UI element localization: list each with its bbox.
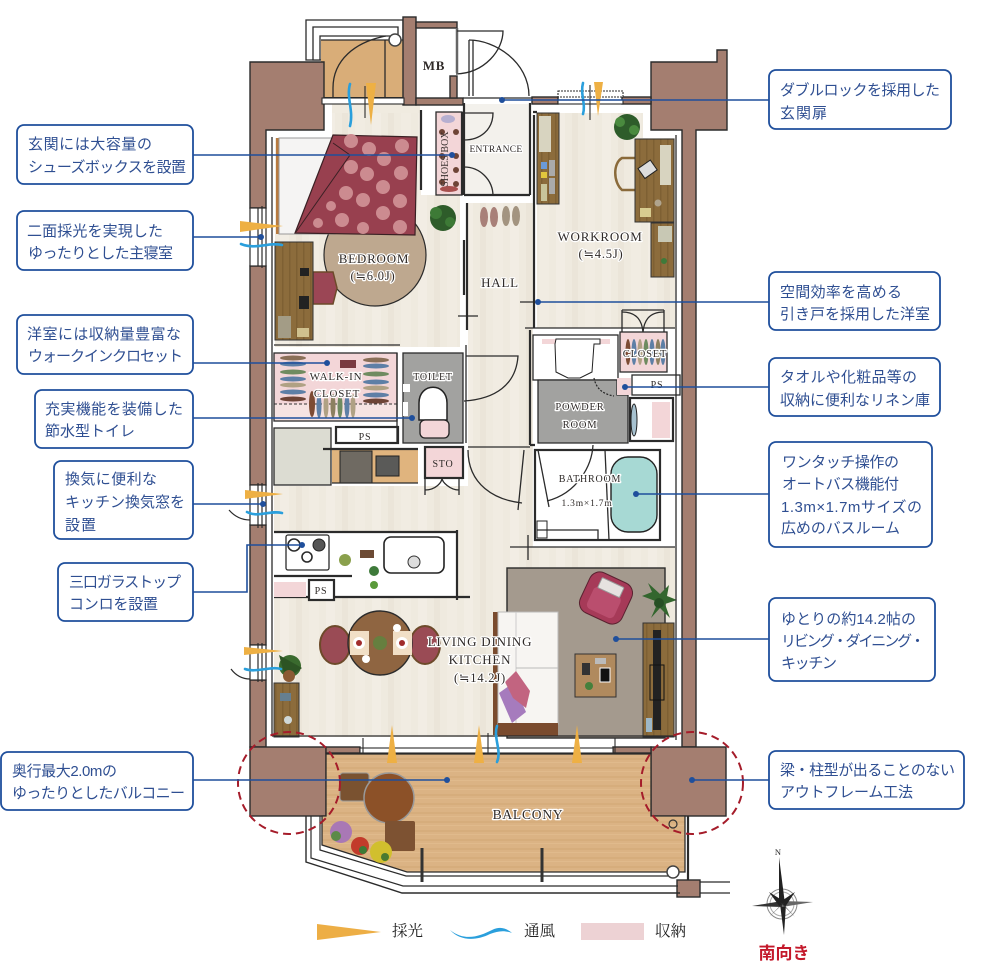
room labels: BATHROOM [559,474,621,485]
room labels: BALCONY [493,807,563,822]
walls [250,17,727,897]
interior partition walls [272,103,676,740]
legend: airflow [450,922,556,940]
callout: LDK: リビング・ダイニング・ [781,633,925,650]
callout: stove: 三口ガラストップ [69,574,181,591]
room labels: PS [315,586,327,597]
callout: balcony: ゆったりとしたバルコニー [12,785,185,802]
room labels: MB [423,58,445,73]
room labels: PS [359,432,371,443]
room labels: STO [432,459,454,470]
room labels: (≒14.2J) [454,671,506,685]
room labels: BOX [440,131,451,153]
callout: linen [622,358,940,416]
room labels [310,58,667,822]
callout: stove [58,542,305,621]
room labels: ROOM [563,420,597,431]
airflow markers [241,83,584,762]
callout: front door [499,70,951,129]
callout: toilet [35,390,415,448]
callout: bedroom: 二面採光を実現した [27,223,163,240]
light markers [240,82,603,763]
callout: kitchen window: 換気に便利な [65,471,157,488]
room: workroom floor [537,113,675,328]
south windows [360,733,615,762]
callout: sliding door [535,272,940,330]
top windows [322,85,623,120]
callout: front door: ダブルロックを採用した [780,81,940,99]
callout: shoe box: 玄関には大容量の [28,136,152,153]
room labels: POWDER [555,402,605,413]
callout: balcony [1,752,450,810]
room: bathroom [535,445,660,540]
room labels: TOILET [413,372,453,383]
room: toilet [403,353,463,443]
compass [752,847,813,963]
room labels: (≒4.5J) [579,247,623,261]
room labels: 1.3m×1.7m [561,499,613,509]
left windows [229,206,266,682]
callout: bathroom: ワンタッチ操作の [782,454,899,471]
legend: storage: 収納 [655,922,686,940]
kitchen island [274,530,470,600]
room: LDK floor [274,486,675,737]
room: STO [425,447,463,478]
TV cabinet [643,623,674,737]
entry porch [306,20,420,113]
callout: balcony: 奥行最大2.0mの [12,763,117,780]
room: hall floor [468,203,533,533]
callout: toilet: 節水型トイレ [45,423,135,440]
legend: storage [581,922,686,940]
callout: linen: タオルや化粧品等の [780,368,917,386]
floor plan [229,17,743,897]
callout: toilet: 充実機能を装備した [45,401,183,418]
callout: outframe [689,751,964,809]
room labels: HALL [481,275,519,290]
legend: light: 採光 [392,922,423,940]
side cabinet and plant [274,655,302,737]
callout: stove: コンロを設置 [69,596,158,613]
callout: bedroom [17,211,264,270]
callout: walk-in closet [17,315,330,374]
callout: outframe: アウトフレーム工法 [780,784,913,801]
callout: front door: 玄関扉 [780,105,827,122]
shoe box [436,112,462,195]
callout: kitchen window: 設置 [65,517,96,534]
room labels: WALK-IN [310,371,362,383]
compass label: 南向き [758,944,810,963]
room labels: LIVING DINING [428,634,532,649]
callout: linen: 収納に便利なリネン庫 [780,392,930,409]
coffee table [575,654,616,697]
callout: sliding door: 引き戸を採用した洋室 [780,306,930,323]
callout: bedroom: ゆったりとした主寝室 [28,245,173,262]
interior white base [266,130,682,747]
callout: bathroom [633,442,932,547]
room labels: PS [651,380,663,391]
legend: light [317,922,423,940]
armchair [576,568,636,628]
kitchen back storage [274,427,418,485]
callout: kitchen window [54,461,266,539]
room: entrance floor [465,104,530,195]
bedroom desk [275,242,337,340]
bedroom rug [324,204,426,306]
callout: outframe: 梁・柱型が出ることのない [780,762,955,779]
room labels: KITCHEN [449,652,511,667]
room: powder room [538,375,680,443]
room labels: BEDROOM [339,251,409,266]
room: walk-in closet [274,353,397,421]
room labels: ENTRANCE [469,145,523,155]
callout: LDK: ゆとりの約14.2帖の [781,611,916,628]
room labels: SHOES [440,155,451,187]
MB and front door [456,28,532,98]
LDK rug [507,568,665,738]
callout: bathroom: 広めのバスルーム [781,520,900,537]
plant [642,583,677,618]
sofa [493,612,558,736]
dashed circles: outframe [238,732,743,834]
room labels: CLOSET [623,349,667,360]
callout: bathroom: オートバス機能付 [782,476,899,493]
callout: bathroom: 1.3m×1.7mサイズの [781,499,922,516]
callout: walk-in closet: ウォークインクロセット [28,348,183,365]
callout: sliding door: 空間効率を高める [780,284,902,301]
slippers [480,206,520,227]
compass: N [775,847,781,857]
legend: airflow: 通風 [524,922,556,940]
legend [317,922,686,940]
callout: LDK: キッチン [781,655,837,672]
room: linen closet [620,310,667,372]
plant: bedroom [430,205,456,231]
plant: workroom [614,114,640,140]
callout: LDK [613,598,935,681]
room labels: (≒6.0J) [351,269,395,283]
room: bedroom floor [275,113,460,347]
room labels: WORKROOM [557,229,643,244]
balcony [306,754,730,893]
room: washroom [533,335,618,380]
workroom furniture [537,113,674,277]
dining table [320,611,440,675]
bed [276,134,417,235]
callout: shoe box: シューズボックスを設置 [28,159,186,176]
callout: walk-in closet: 洋室には収納量豊富な [27,326,181,343]
callout: shoe box [17,125,455,184]
room labels: CLOSET [314,388,360,400]
callout: kitchen window: キッチン換気窓を [65,494,185,511]
